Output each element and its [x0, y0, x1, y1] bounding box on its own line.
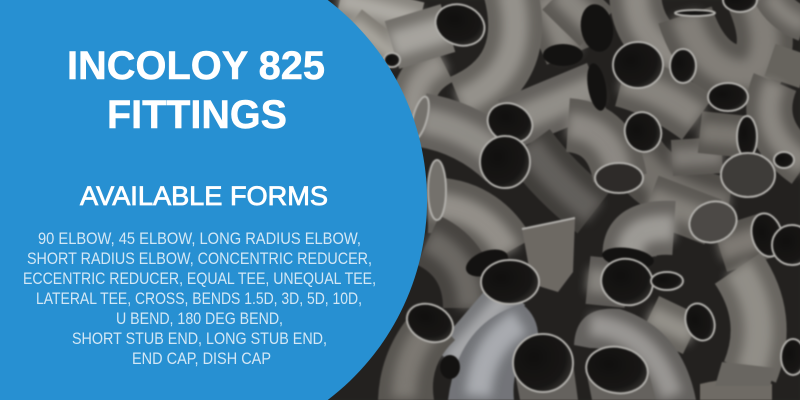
- elbow openings with bright rims: [384, 0, 800, 398]
- front row of elbow bodies: [378, 228, 775, 400]
- panel: blue circular panel: [0, 0, 427, 400]
- title: [67, 44, 325, 137]
- text block: list of forms: END CAP, DISH CAP: [132, 349, 271, 368]
- heading: available forms: AVAILABLE FORMS: [80, 181, 328, 211]
- text block: list of forms: U BEND, 180 DEG BEND,: [116, 309, 283, 328]
- middle row of elbow bodies: [422, 80, 800, 308]
- cut cylinder fitting: [522, 218, 575, 292]
- text block: list of forms: 90 ELBOW, 45 ELBOW, LONG RADIUS ELBOW,: [38, 229, 361, 248]
- title: FITTINGS: [107, 93, 287, 137]
- back row of elbow bodies: [340, 0, 800, 118]
- title: INCOLOY 825: [67, 44, 325, 88]
- text block: list of forms: SHORT STUB END, LONG STUB END,: [72, 329, 327, 348]
- text block: list of forms: [23, 229, 376, 368]
- text block: list of forms: SHORT RADIUS ELBOW, CONCENTRIC REDUCER,: [27, 249, 372, 268]
- text block: list of forms: LATERAL TEE, CROSS, BENDS 1.5D, 3D, 5D, 10D,: [36, 289, 362, 308]
- text block: list of forms: ECCENTRIC REDUCER, EQUAL TEE, UNEQUAL TEE,: [23, 269, 376, 288]
